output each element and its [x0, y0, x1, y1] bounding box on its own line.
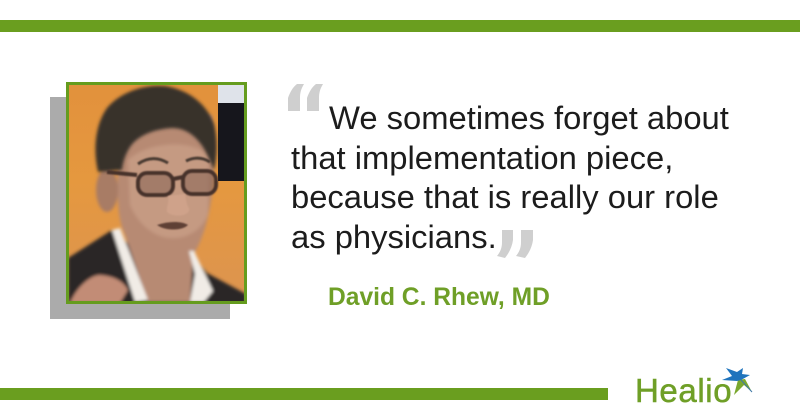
quote text: because that is really our role — [291, 178, 719, 215]
portrait photo of David C. Rhew — [66, 82, 247, 304]
bottom green bar — [0, 388, 608, 400]
Healio logo — [635, 368, 752, 408]
quote text: as physicians. — [291, 218, 497, 255]
attribution name: David C. Rhew, MD — [328, 284, 550, 311]
logo wordmark: Healio — [635, 372, 732, 408]
quote text: We sometimes forget about — [329, 99, 729, 136]
opening quotation mark — [288, 84, 323, 111]
glasses — [107, 171, 216, 195]
photo shadow panel — [50, 97, 230, 319]
top green bar — [0, 20, 800, 32]
quote text: that implementation piece, — [291, 139, 673, 176]
closing quotation mark — [497, 230, 533, 258]
hair — [95, 86, 217, 172]
logo star — [722, 368, 752, 395]
